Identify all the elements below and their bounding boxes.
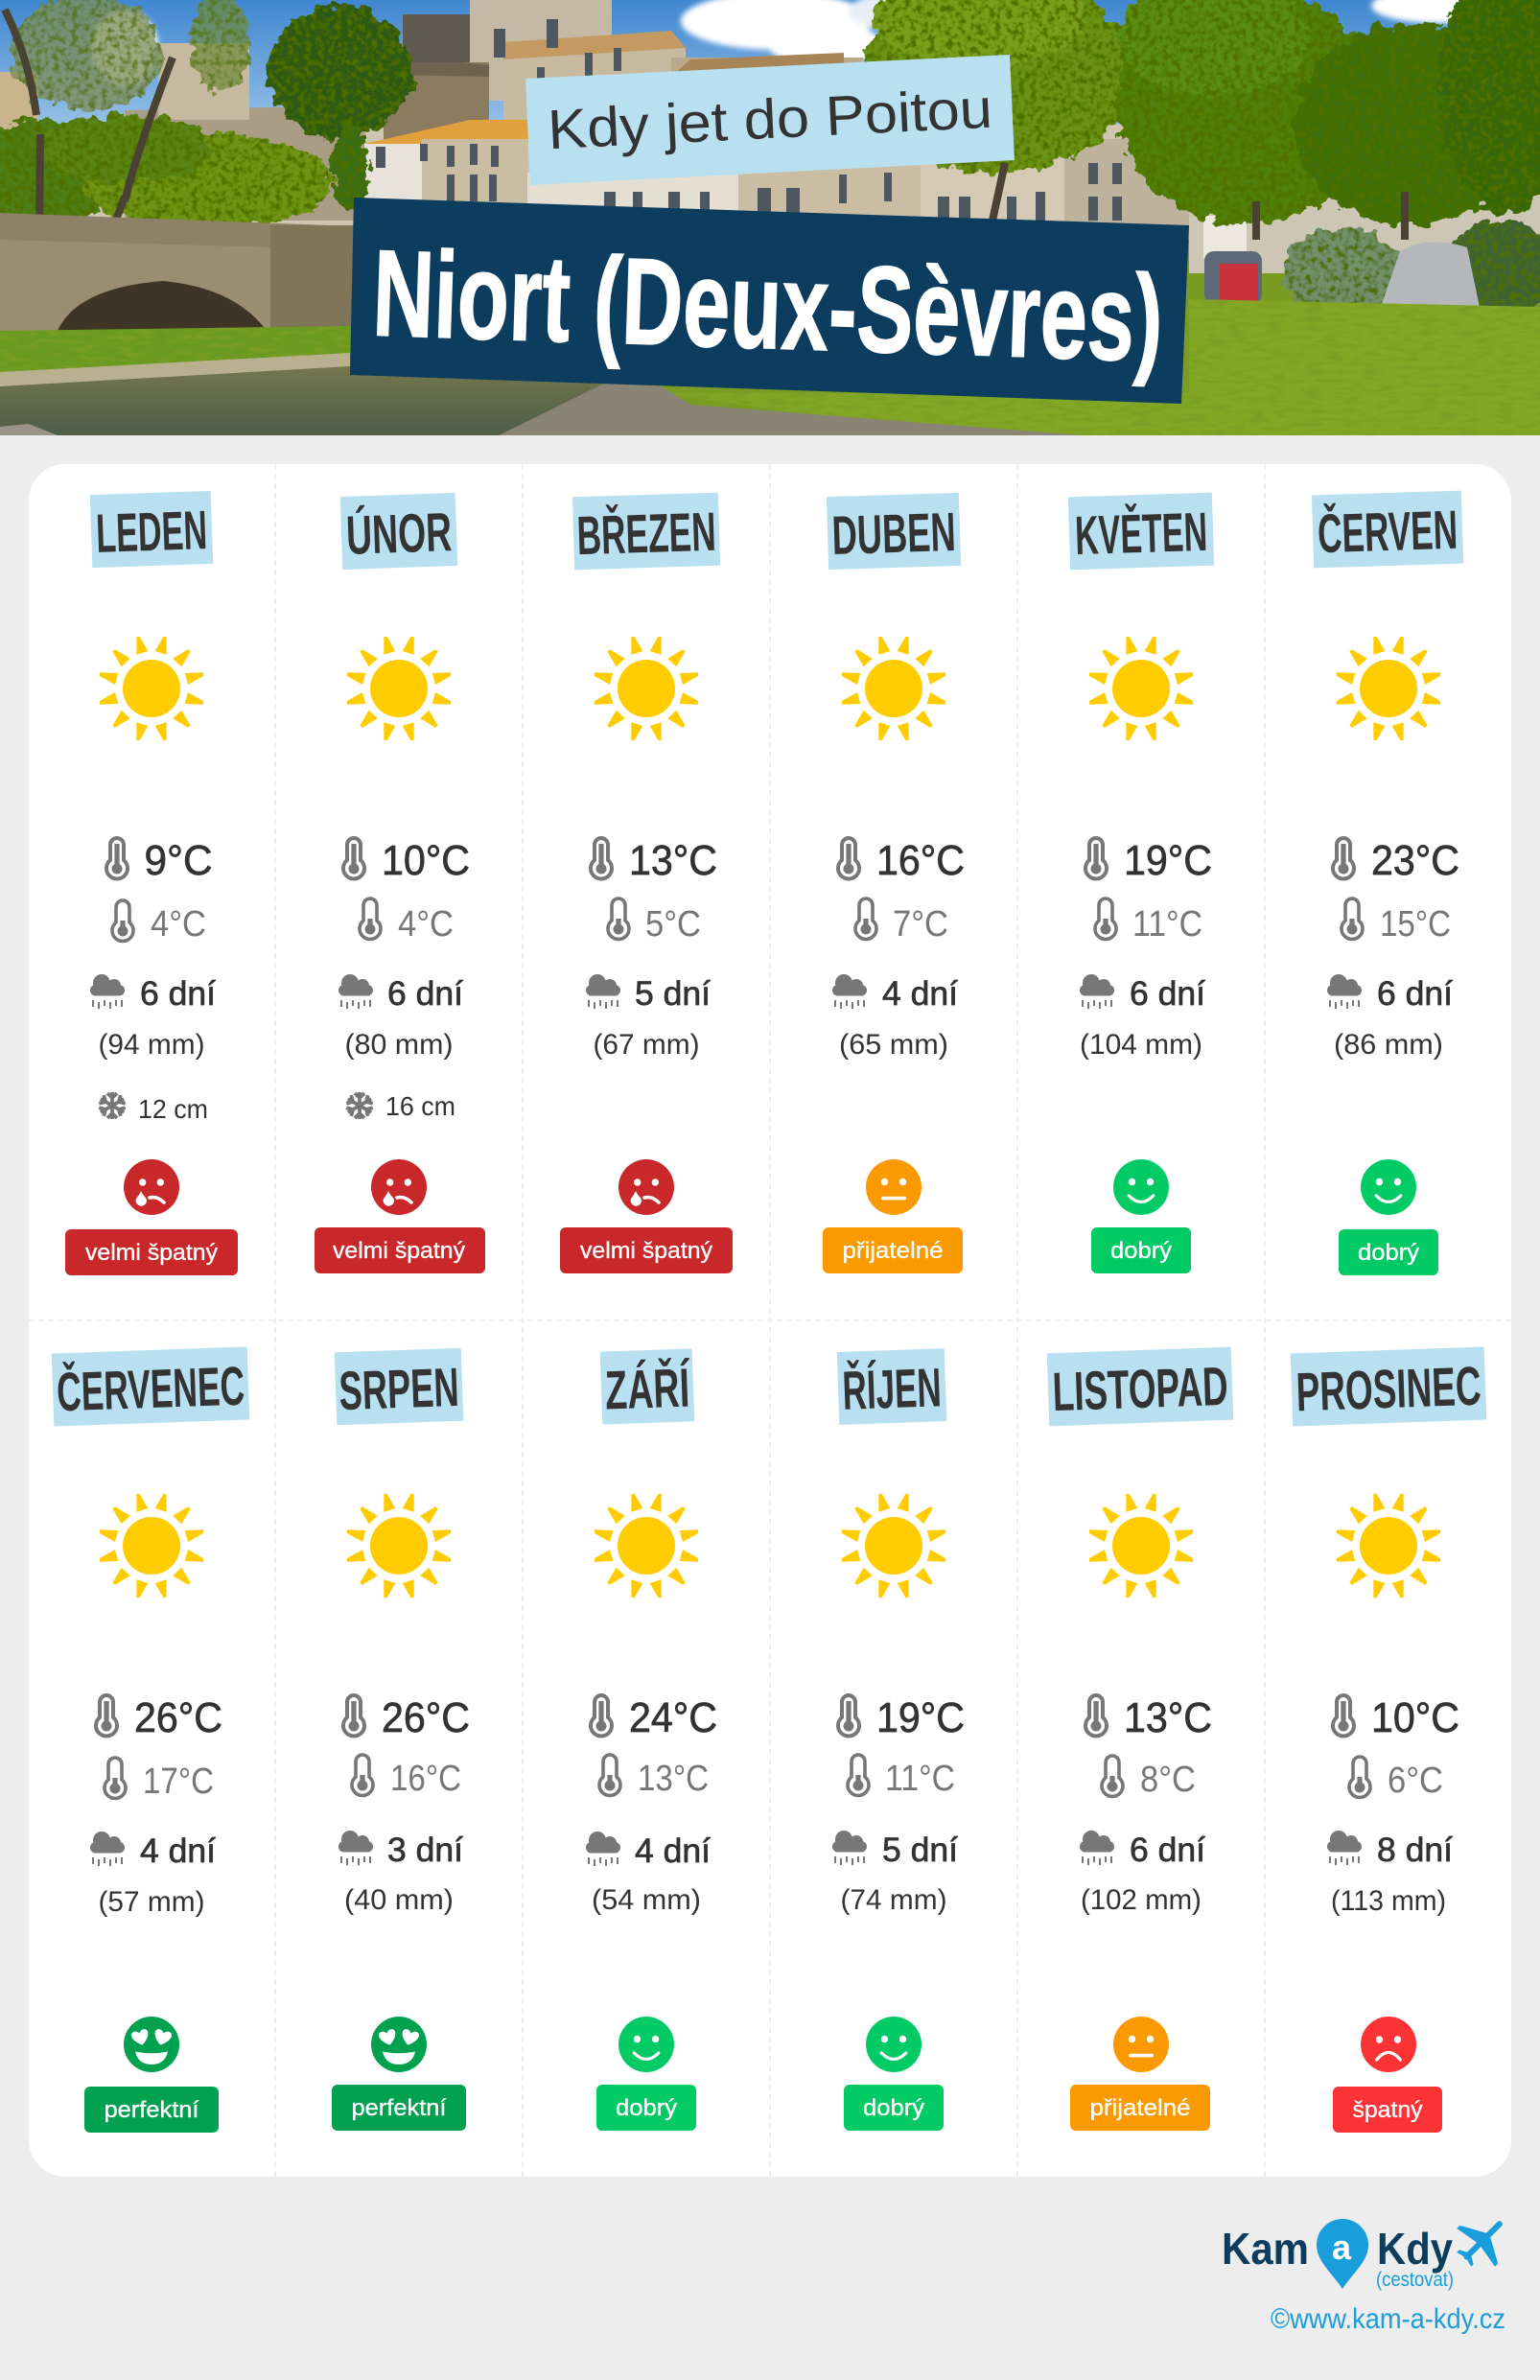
badge: špatný [1333, 2087, 1442, 2133]
heading: Srpen: SRPEN [338, 1357, 460, 1422]
max temperature: 10°C [382, 837, 470, 884]
rain days [338, 974, 463, 1013]
precipitation: (54 mm) [592, 1884, 701, 1916]
heading: Září: ZÁŘÍ [604, 1356, 692, 1422]
rain days: 5 dní [635, 975, 711, 1013]
min temperature [360, 898, 454, 945]
badge: velmi špatný [65, 1229, 238, 1275]
rain days: 8 dní [1377, 1832, 1453, 1869]
min temperature: 5°C [645, 904, 701, 945]
rain days [338, 1831, 463, 1869]
precipitation: (104 mm) [1080, 1029, 1202, 1061]
heading: Červen [1312, 491, 1463, 568]
rain days: 6 dní [140, 975, 216, 1013]
badge: dobrý: dobrý [1110, 1238, 1172, 1264]
min temperature: 4°C [151, 904, 206, 945]
min temperature: 11°C [1132, 904, 1202, 945]
heading: Březen: BŘEZEN [576, 501, 717, 567]
logo: Kam a Kdy: (cestovat) [1376, 2269, 1454, 2291]
panel: monthly climate table [29, 464, 1511, 2177]
month: Leden [65, 491, 238, 1275]
month: Říjen [832, 1348, 965, 2131]
badge: dobrý [844, 2085, 944, 2131]
rain days: 4 dní [635, 1832, 711, 1870]
heading: Říjen: ŘÍJEN [841, 1356, 943, 1422]
icon: map pin: a [1332, 2228, 1352, 2267]
snow [345, 1091, 455, 1121]
hero photo: riverside town [0, 0, 1540, 435]
icon: sun [1089, 637, 1193, 740]
max temperature: 13°C [1124, 1694, 1212, 1741]
rain days: 6 dní [1377, 975, 1453, 1013]
trees [0, 0, 1540, 319]
icon: sun [100, 1494, 203, 1598]
max temperature [838, 837, 965, 884]
logo: Kam a Kdy: Kdy [1377, 2224, 1453, 2274]
heading: Březen [572, 493, 720, 570]
month: Prosinec [1291, 1346, 1486, 2133]
rain days: 6 dní [1130, 975, 1205, 1013]
badge: dobrý: dobrý [1358, 1240, 1419, 1266]
badge: perfektní [332, 2085, 466, 2131]
rain days [90, 974, 216, 1013]
max temperature [591, 837, 717, 884]
min temperature [848, 1755, 955, 1799]
badge: dobrý: dobrý [863, 2095, 924, 2121]
min temperature [1102, 1756, 1196, 1800]
icon: sun [595, 637, 698, 740]
smiley: good [618, 2017, 674, 2072]
badge: velmi špatný: velmi špatný [85, 1240, 218, 1266]
precipitation: (113 mm) [1331, 1885, 1446, 1917]
max temperature [343, 837, 470, 884]
month: Červenec [52, 1346, 249, 2133]
min temperature: 16°C [390, 1759, 461, 1799]
precipitation: (40 mm) [344, 1884, 454, 1916]
snow [98, 1092, 208, 1124]
precipitation: (80 mm) [344, 1029, 454, 1061]
base ground [350, 240, 1540, 414]
min temperature: 4°C [398, 904, 454, 945]
subtitle: Kdy jet do Poitou: Kdy jet do Poitou [547, 78, 993, 161]
max temperature [106, 837, 213, 884]
min temperature: 17°C [143, 1762, 214, 1802]
max temperature [96, 1694, 222, 1741]
badge: perfektní [84, 2087, 219, 2133]
icon: sun [842, 637, 945, 740]
min temperature: 7°C [893, 904, 948, 945]
heading: Srpen [335, 1348, 463, 1425]
min temperature [105, 1758, 214, 1802]
max temperature: 19°C [876, 1694, 965, 1741]
precipitation: (94 mm) [98, 1029, 205, 1061]
rain days: 5 dní [882, 1832, 958, 1869]
heading: Listopad [1047, 1347, 1233, 1426]
heading: Duben: DUBEN [831, 502, 957, 567]
max temperature: 19°C [1124, 837, 1212, 884]
min temperature [112, 900, 206, 945]
badge: přijatelné: přijatelné [842, 1238, 944, 1264]
rain days [832, 1831, 958, 1869]
heading: Leden [90, 491, 213, 568]
badge: perfektní: perfektní [351, 2095, 447, 2121]
subtitle: Kdy jet do Poitou [525, 55, 1015, 185]
min temperature: 13°C [638, 1759, 709, 1799]
heading: Únor: ÚNOR [345, 502, 453, 567]
heading: Duben [827, 493, 961, 570]
rain days: 6 dní [1130, 1832, 1205, 1869]
heading: Červen: ČERVEN [1317, 499, 1458, 565]
max temperature [838, 1694, 965, 1741]
badge: perfektní: perfektní [104, 2097, 199, 2123]
badge: dobrý [596, 2085, 696, 2131]
min temperature [599, 1755, 709, 1799]
badge: přijatelné [823, 1227, 963, 1273]
smiley: bad [1361, 2017, 1416, 2072]
badge: špatný: špatný [1352, 2097, 1423, 2123]
max temperature [591, 1694, 717, 1741]
icon: sun [347, 637, 451, 740]
max temperature [343, 1694, 470, 1741]
rain days [1080, 1831, 1205, 1869]
heading: Říjen [837, 1348, 946, 1425]
rain days: 4 dní [882, 975, 958, 1013]
max temperature: 16°C [876, 837, 965, 884]
title: Niort (Deux-Sèvres) [350, 198, 1189, 404]
left retaining wall and house [125, 105, 364, 221]
icon: sun [347, 1494, 451, 1598]
smiley: perfect [124, 2017, 179, 2072]
heading: Květen: KVĚTEN [1074, 501, 1208, 567]
rain days: 3 dní [387, 1832, 463, 1869]
min temperature [1342, 898, 1451, 945]
heading: Leden: LEDEN [95, 500, 208, 565]
smiley: very bad [124, 1159, 179, 1215]
parked cars [1204, 251, 1262, 304]
max temperature: 24°C [629, 1694, 717, 1741]
heading: Květen [1068, 493, 1214, 570]
grass [662, 299, 1540, 435]
water and stone banks [0, 362, 652, 435]
precipitation: (86 mm) [1334, 1029, 1443, 1061]
icon: sun [1089, 1494, 1193, 1598]
min temperature [608, 898, 701, 945]
precipitation: (67 mm) [593, 1029, 700, 1061]
icon: map pin [1317, 2219, 1368, 2289]
rain days [1327, 974, 1453, 1013]
snow: 16 cm [385, 1091, 455, 1121]
month: Červen [1312, 491, 1463, 1275]
stone bridge [0, 213, 328, 247]
smiley: good [866, 2017, 922, 2072]
heading: Únor [340, 493, 457, 570]
max temperature: 26°C [134, 1694, 222, 1741]
max temperature: 10°C [1371, 1694, 1459, 1741]
month: Únor [315, 493, 485, 1273]
max temperature: 26°C [382, 1694, 470, 1741]
precipitation: (74 mm) [840, 1884, 947, 1916]
min temperature: 11°C [885, 1759, 955, 1799]
badge: velmi špatný [315, 1227, 485, 1273]
badge: dobrý [1339, 1229, 1438, 1275]
badge: dobrý [1091, 1227, 1191, 1273]
icon: sun [1337, 637, 1440, 740]
cathedral and upper town [470, 0, 612, 101]
precipitation: (57 mm) [98, 1886, 205, 1918]
max temperature [1085, 837, 1212, 884]
rain days [586, 1832, 711, 1870]
badge: velmi špatný: velmi špatný [333, 1238, 465, 1264]
smiley: good [1361, 1159, 1416, 1215]
max temperature [1085, 1694, 1212, 1741]
min temperature [855, 898, 948, 945]
min temperature [1349, 1757, 1443, 1801]
month: Září [586, 1348, 717, 2131]
smiley: acceptable [1113, 2017, 1169, 2072]
rain days [586, 974, 711, 1013]
icon: sun [1337, 1494, 1440, 1598]
rain days [1080, 974, 1205, 1013]
badge: velmi špatný: velmi špatný [580, 1238, 712, 1264]
heading: Září [600, 1348, 694, 1425]
heading: Listopad: LISTOPAD [1052, 1356, 1229, 1423]
heading: Červenec: ČERVENEC [56, 1355, 245, 1423]
max temperature: 9°C [144, 837, 213, 884]
max temperature: 23°C [1371, 837, 1459, 884]
icon: sun [842, 1494, 945, 1598]
rain days [90, 1832, 216, 1870]
smiley: perfect [371, 2017, 427, 2072]
snow: 12 cm [138, 1094, 208, 1124]
month: Březen [560, 493, 733, 1273]
smiley: very bad [618, 1159, 674, 1215]
max temperature [1333, 1694, 1459, 1741]
rain days: 4 dní [140, 1832, 216, 1870]
min temperature [1095, 898, 1202, 945]
logo: Kam a Kdy [1222, 2203, 1521, 2291]
badge: dobrý: dobrý [616, 2095, 677, 2121]
website credit: ©www.kam-a-kdy.cz [1271, 2303, 1505, 2335]
month: Duben [823, 493, 965, 1273]
month: Květen [1068, 493, 1214, 1273]
badge: přijatelné [1070, 2085, 1210, 2131]
icon: airplane [1445, 2203, 1521, 2278]
title: Niort (Deux-Sèvres): Niort (Deux-Sèvres) [371, 224, 1165, 388]
icon: sun [100, 637, 203, 740]
rain days: 6 dní [387, 975, 463, 1013]
badge: přijatelné: přijatelné [1089, 2095, 1191, 2121]
tree trunks [2, 8, 1409, 240]
heading: Červenec [52, 1346, 249, 1427]
smiley: very bad [371, 1159, 427, 1215]
min temperature [352, 1755, 461, 1799]
min temperature: 6°C [1388, 1761, 1443, 1801]
rain days [832, 974, 958, 1013]
min temperature: 15°C [1380, 904, 1451, 945]
precipitation: (102 mm) [1081, 1884, 1202, 1916]
precipitation: (65 mm) [839, 1029, 948, 1061]
smiley: good [1113, 1159, 1169, 1215]
smiley: acceptable [866, 1159, 922, 1215]
month: Srpen [332, 1348, 470, 2131]
icon: sun [595, 1494, 698, 1598]
month: Listopad [1047, 1347, 1233, 2131]
max temperature [1333, 837, 1459, 884]
rain days [1327, 1831, 1453, 1869]
min temperature: 8°C [1140, 1760, 1196, 1800]
badge: velmi špatný [560, 1227, 733, 1273]
max temperature: 13°C [629, 837, 717, 884]
logo: Kam a Kdy: Kam [1222, 2224, 1309, 2274]
